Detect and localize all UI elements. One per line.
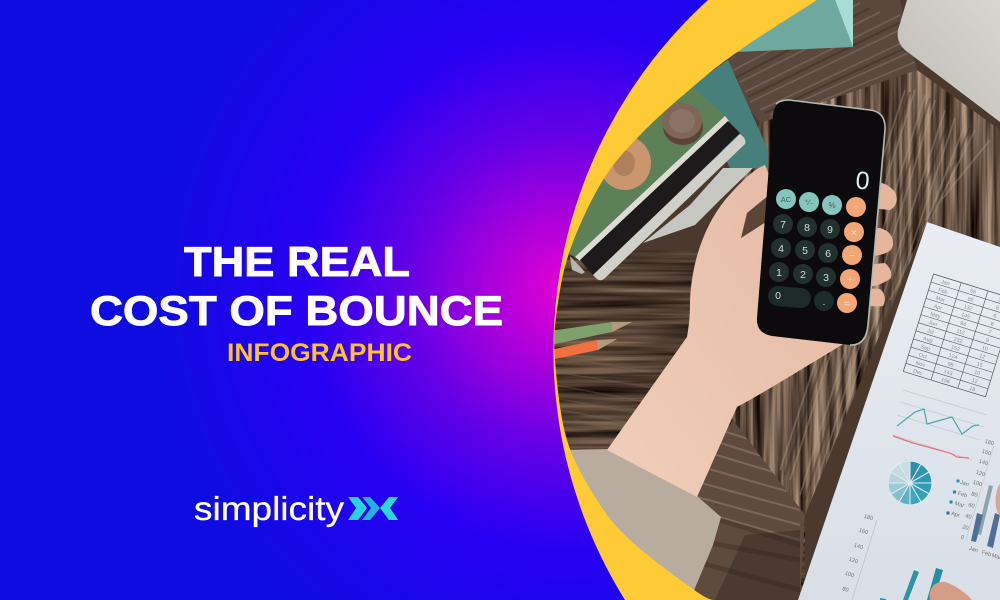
calculator keypad: 4 xyxy=(778,243,784,255)
bar chart: right: 80 xyxy=(970,491,978,499)
data table: 8 xyxy=(990,321,994,328)
bar chart: bottom: 100 xyxy=(844,571,855,579)
data table: 232 xyxy=(953,336,963,345)
data table xyxy=(903,274,1000,397)
data table: 6 xyxy=(995,305,1000,312)
bar chart: right: 160 xyxy=(981,449,992,457)
teal triangle xyxy=(690,60,768,168)
calculator keypad: = xyxy=(844,298,850,310)
calculator keypad: 9 xyxy=(827,224,833,236)
laptop corner xyxy=(898,0,1000,122)
gradient background panel xyxy=(0,0,708,600)
bar chart: right: 140 xyxy=(978,459,989,467)
data table: 94 xyxy=(959,321,967,328)
data table: 12 xyxy=(978,353,986,361)
bar chart: bottom: 180 xyxy=(863,514,874,522)
bar chart: right: 20 xyxy=(961,524,969,532)
calculator keypad: 3 xyxy=(823,272,829,284)
bar chart: right: Jan xyxy=(968,546,978,554)
title: THE REAL xyxy=(184,238,410,285)
sleeve xyxy=(560,449,721,600)
calculator keypad: + xyxy=(847,274,853,286)
calculator keypad: 6 xyxy=(825,248,831,260)
calculator keypad: % xyxy=(828,201,836,210)
hand and forearm xyxy=(607,165,845,497)
wood planks xyxy=(540,0,1000,600)
line chart xyxy=(893,390,987,460)
calculator keypad: − xyxy=(849,250,855,262)
data table: 152 xyxy=(950,345,961,353)
data table: 12 xyxy=(971,378,978,385)
bar chart: right: 180 xyxy=(984,439,995,447)
bar chart: right: Feb xyxy=(981,550,992,558)
data table: Apr xyxy=(933,304,943,312)
calculator keypad: 2 xyxy=(800,269,806,281)
calculator keypad: 8 xyxy=(804,222,810,234)
bar chart: right: 0 xyxy=(960,535,965,541)
title: COST OF BOUNCE xyxy=(90,287,503,334)
coin stack xyxy=(662,103,703,145)
data table: Mar xyxy=(935,295,946,304)
data table: May xyxy=(929,312,941,320)
bar chart: right: Feb xyxy=(957,491,968,499)
calculator keypad: × xyxy=(851,227,857,239)
calculator keypad: AC xyxy=(781,195,792,204)
fingers xyxy=(858,182,897,306)
logo: simplicityDX xyxy=(194,490,398,527)
data table: 145 xyxy=(960,312,971,321)
fingertip on paper xyxy=(930,582,972,600)
bar chart: right: Jan xyxy=(959,480,969,488)
bar chart: bottom: 120 xyxy=(848,557,859,565)
bar chart: bottom: 140 xyxy=(853,543,864,551)
grey card underneath xyxy=(643,168,753,243)
bar chart: bottom xyxy=(841,514,943,600)
logo mark chevrons xyxy=(348,497,398,520)
calculator keypad: . xyxy=(823,296,825,308)
data table: Sep xyxy=(920,344,931,353)
bar chart: right: Mar xyxy=(954,501,965,509)
calculator display: 0 xyxy=(855,167,870,195)
data table: Jun xyxy=(928,320,938,328)
data table: 10 xyxy=(981,345,988,353)
data table: 6 xyxy=(992,313,997,320)
data table: 18 xyxy=(968,386,976,393)
calculator keypad xyxy=(767,189,866,313)
data table: 132 xyxy=(963,304,973,312)
gap between thumb and palm xyxy=(741,195,769,238)
green card with stripe xyxy=(550,85,745,280)
data table: Jul xyxy=(926,328,934,336)
bar chart: right: 100 xyxy=(972,480,983,488)
data table: Jan xyxy=(940,279,950,288)
data table: 15 xyxy=(976,361,983,369)
data table: 10 xyxy=(973,370,981,377)
data table: Nov xyxy=(915,360,926,369)
data table: 9 xyxy=(985,338,989,344)
coin: bitcoin xyxy=(599,136,651,190)
paper document xyxy=(798,222,1000,600)
logo: simplicityDX: simplicity xyxy=(194,490,345,527)
pie chart xyxy=(887,460,933,506)
calculator keypad: ⁺∕₋ xyxy=(804,198,814,207)
data table: Dec xyxy=(912,368,923,377)
data table: 112 xyxy=(955,328,965,337)
data table: Oct xyxy=(918,352,928,361)
data table: 7 xyxy=(987,329,992,336)
data table: 143 xyxy=(943,369,953,377)
calculator keypad: 7 xyxy=(780,219,786,231)
data table: 156 xyxy=(940,377,950,385)
bar chart: bottom: 160 xyxy=(858,528,869,536)
bar chart: right: 40 xyxy=(964,513,972,521)
bar chart: bottom: 80 xyxy=(841,586,849,594)
data table: Feb xyxy=(937,287,948,296)
calculator keypad: 5 xyxy=(802,245,808,257)
calculator keypad: 1 xyxy=(776,267,782,279)
calculator keypad: 0 xyxy=(775,290,781,302)
bar chart: right: 120 xyxy=(975,470,986,478)
bar chart: right xyxy=(946,439,1000,561)
pencils xyxy=(550,322,632,360)
phone xyxy=(757,100,885,345)
data table: 98 xyxy=(947,361,954,369)
title xyxy=(90,238,503,334)
data table: 56 xyxy=(969,288,977,296)
data table: 124 xyxy=(948,353,958,361)
photo: desk with phone calculator xyxy=(540,0,1000,600)
bar chart: right: Apr xyxy=(950,511,960,519)
calculator keypad: ÷ xyxy=(853,201,859,213)
bar chart: right: 60 xyxy=(967,502,975,510)
data table: Aug xyxy=(922,336,933,345)
subtitle: INFOGRAPHIC xyxy=(227,339,412,367)
fingertip on chart edge xyxy=(996,484,1000,516)
data table: 85 xyxy=(967,296,974,304)
teal pyramid xyxy=(735,0,853,52)
